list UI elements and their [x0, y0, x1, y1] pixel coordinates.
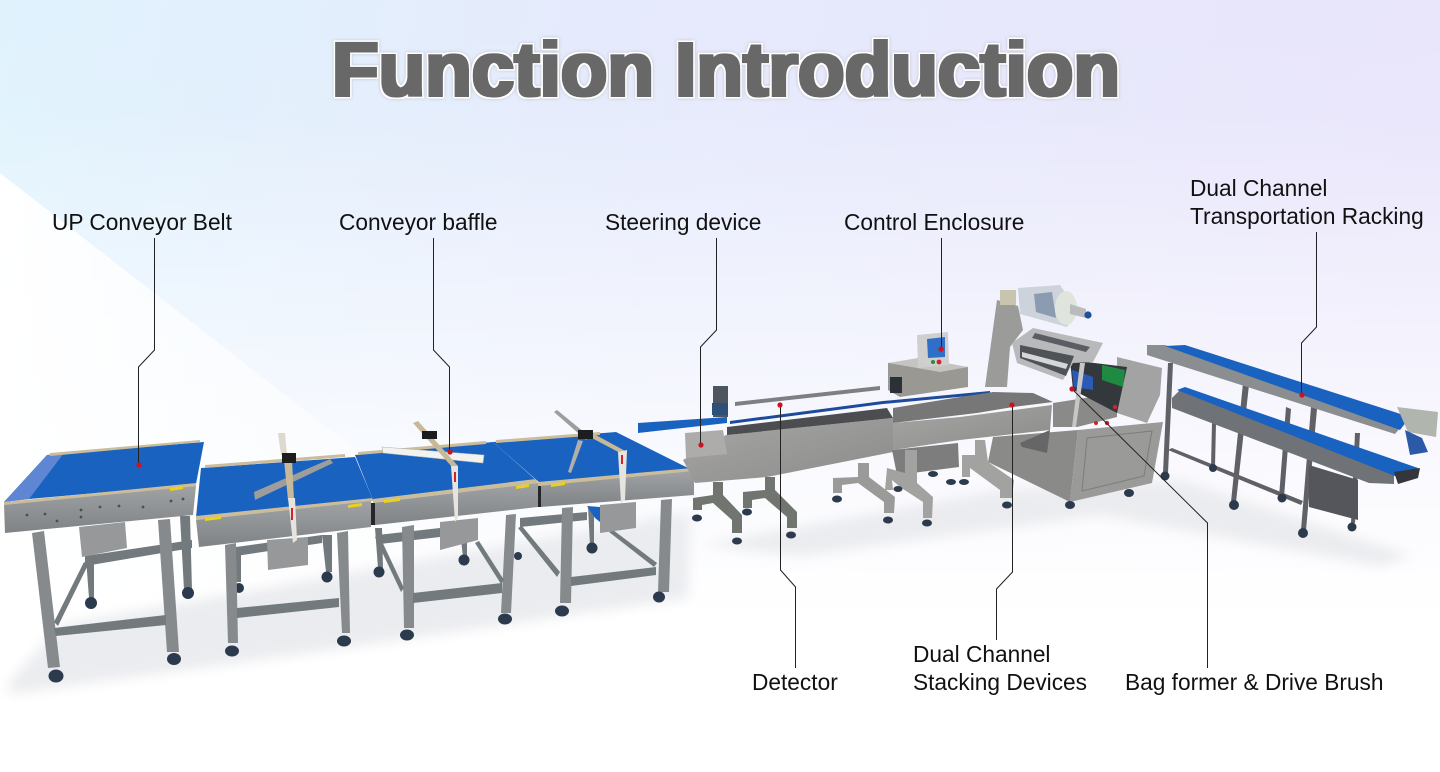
leader: Dual Channel Transportation Racking — [1190, 175, 1424, 398]
motor plate — [79, 522, 127, 557]
lower belt — [1177, 387, 1418, 480]
buttons — [931, 360, 941, 364]
leader: Control Enclosure: Control Enclosure — [844, 209, 1024, 235]
film roll — [1000, 285, 1092, 327]
dark channel — [727, 408, 893, 435]
belt — [4, 442, 204, 502]
title: Function Introduction — [332, 27, 1120, 113]
small blue belt — [638, 417, 727, 433]
leader: Bag former and Drive Brush — [1069, 386, 1383, 695]
back legs and bar — [85, 516, 194, 609]
baffle — [254, 459, 333, 500]
back legs and bar — [374, 528, 522, 578]
leader: Dual Channel Stacking Devices: Dual Channel — [913, 641, 1050, 667]
hmi screen — [927, 337, 945, 358]
main body — [683, 418, 893, 483]
machine: third conveyor section — [355, 421, 538, 640]
leveling feet — [692, 496, 893, 544]
hmi panel — [917, 332, 949, 368]
leader: Detector — [752, 402, 838, 695]
leader: Dual Channel Stacking Devices: Stacking Devices — [913, 669, 1087, 695]
base box — [888, 360, 968, 397]
machine: control enclosure — [888, 332, 968, 397]
leader: Dual Channel Transportation Racking: Transportation Racking — [1190, 203, 1424, 229]
frame holes — [26, 498, 184, 522]
back legs — [520, 507, 598, 554]
side frame — [538, 471, 694, 507]
floor shadows — [8, 480, 1412, 694]
lower cabinet — [892, 443, 959, 475]
leader: Steering device: Steering device — [605, 209, 761, 235]
blue mechanism — [1072, 370, 1093, 390]
belt — [196, 457, 373, 517]
motor plate — [600, 502, 636, 533]
machine: steering device and detector section — [638, 386, 990, 544]
roller assembly — [1012, 328, 1103, 380]
top deck — [893, 392, 1053, 423]
upper conveyor frame — [1147, 345, 1400, 434]
baffle arm — [278, 433, 297, 543]
dark mechanism interior — [1070, 360, 1127, 413]
steering motor — [712, 386, 728, 417]
white baffle — [382, 447, 484, 463]
belt — [355, 442, 536, 500]
leader: Bag former and Drive Brush: Bag former & Drive Brush — [1125, 669, 1383, 695]
base cabinet — [988, 422, 1163, 509]
baffle arm — [554, 410, 627, 503]
leader: Dual Channel Transportation Racking: Dual Channel — [1190, 175, 1327, 201]
back legs and bar — [234, 535, 332, 593]
front legs — [518, 499, 672, 616]
machine: flow wrapper — [985, 285, 1163, 509]
leader: Control Enclosure — [844, 209, 1024, 352]
belt — [493, 432, 692, 483]
feet — [885, 440, 1014, 518]
rack feet — [1160, 464, 1356, 538]
warning label — [551, 482, 565, 487]
front legs — [32, 519, 181, 682]
warning labels — [205, 503, 362, 521]
frame end gap — [538, 486, 541, 507]
baffle arm — [413, 421, 458, 522]
leader: UP Conveyor Belt — [52, 209, 233, 468]
front legs — [225, 531, 351, 656]
leader: Dual Channel Stacking Devices — [913, 402, 1087, 695]
side frame — [196, 501, 371, 547]
side frame — [4, 486, 196, 533]
machine: second conveyor section — [196, 433, 373, 656]
lower conveyor frame — [1172, 390, 1394, 484]
top blue strip — [730, 391, 990, 424]
electrical box — [1309, 465, 1358, 520]
support legs — [693, 463, 895, 533]
drive motor — [1397, 407, 1438, 455]
motor plate — [440, 518, 478, 550]
leveling feet — [894, 471, 1012, 526]
top rails — [4, 440, 200, 506]
white column — [1072, 363, 1085, 427]
right housing — [1117, 357, 1162, 423]
machine: fourth conveyor section — [493, 410, 694, 616]
upper belt — [1165, 345, 1410, 430]
machine: up conveyor belt section — [4, 440, 204, 682]
leader: Conveyor baffle — [339, 209, 498, 455]
green panel — [1102, 365, 1125, 387]
leader: Steering device — [605, 209, 761, 448]
leader: UP Conveyor Belt: UP Conveyor Belt — [52, 209, 233, 235]
machine: dual channel transportation racking — [1147, 345, 1438, 538]
guide rail — [735, 386, 880, 406]
red buttons — [1094, 405, 1117, 425]
legs and cross bars — [1163, 363, 1360, 530]
frame end gap — [371, 503, 375, 525]
body — [893, 405, 1052, 450]
leader: Detector: Detector — [752, 669, 838, 695]
lower mid body — [1053, 393, 1117, 427]
motor plate — [267, 537, 308, 570]
tower — [985, 300, 1023, 387]
front legs — [375, 514, 516, 640]
warning label — [170, 486, 183, 491]
steering plate — [685, 430, 727, 458]
warning labels — [384, 484, 529, 503]
leader: Conveyor baffle: Conveyor baffle — [339, 209, 498, 235]
side frame — [373, 483, 538, 525]
fan — [890, 377, 902, 393]
machine: stacking section — [885, 392, 1053, 526]
